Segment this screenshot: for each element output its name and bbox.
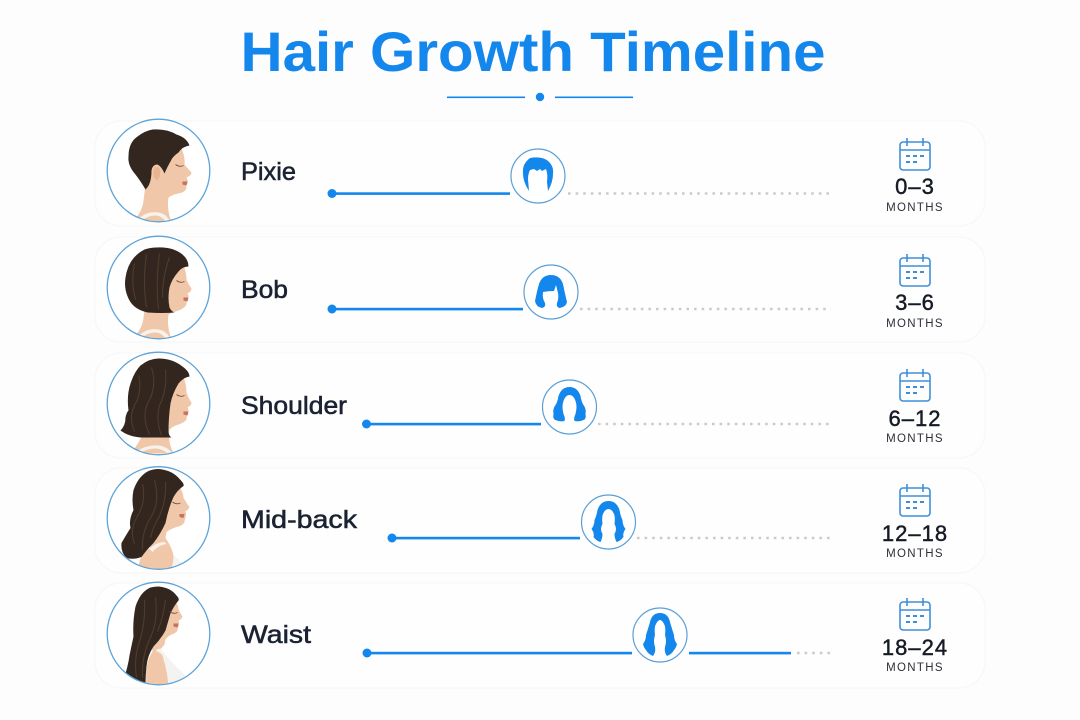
- panel: Shoulder row: [95, 352, 985, 458]
- title: Hair Growth Timeline: [240, 20, 826, 83]
- icon: calendar: [900, 484, 930, 516]
- duration: 6-12 months: 6–12: [889, 406, 941, 431]
- label: Shoulder: [241, 392, 347, 420]
- duration: 6-12 months: [886, 369, 944, 445]
- icon: pixie hair: [511, 149, 565, 203]
- progress track: [362, 648, 831, 658]
- label: Waist: [241, 621, 311, 649]
- duration: 0-3 months: MONTHS: [886, 202, 944, 214]
- title divider: [447, 93, 633, 101]
- panel: Waist row: [95, 582, 985, 688]
- portrait: pixie: [107, 119, 210, 223]
- panel: Mid-back row: [95, 467, 985, 573]
- duration: 3-6 months: 3–6: [895, 290, 935, 315]
- icon: bob hair: [524, 265, 578, 319]
- icon: calendar: [900, 598, 930, 630]
- label: Bob: [241, 276, 288, 304]
- panel: Bob row: [95, 236, 985, 342]
- duration: 12-18 months: [882, 484, 948, 560]
- progress track: [328, 304, 831, 314]
- progress track: [362, 420, 831, 428]
- panel: Pixie row: [95, 119, 985, 226]
- duration: 12-18 months: MONTHS: [886, 548, 944, 560]
- portrait: waist: [107, 582, 210, 686]
- duration: 18-24 months: MONTHS: [886, 662, 944, 674]
- duration: 0-3 months: [886, 138, 944, 214]
- duration: 18-24 months: [882, 598, 948, 674]
- icon: calendar: [900, 138, 930, 170]
- portrait: mid-back: [107, 467, 210, 570]
- duration: 3-6 months: MONTHS: [886, 318, 944, 330]
- label: Mid-back: [241, 506, 358, 534]
- icon: shoulder hair: [542, 380, 596, 434]
- portrait: shoulder: [107, 352, 210, 455]
- duration: 12-18 months: 12–18: [882, 521, 948, 546]
- duration: 6-12 months: MONTHS: [886, 433, 944, 445]
- progress track: [388, 534, 831, 542]
- icon: calendar: [900, 254, 930, 286]
- progress track: [328, 189, 831, 198]
- icon: calendar: [900, 369, 930, 401]
- portrait: bob: [107, 236, 210, 340]
- duration: 3-6 months: [886, 254, 944, 330]
- icon: mid-back hair: [582, 495, 636, 549]
- icon: waist hair: [633, 608, 687, 662]
- duration: 0-3 months: 0–3: [895, 174, 935, 199]
- label: Pixie: [241, 158, 296, 186]
- duration: 18-24 months: 18–24: [882, 635, 948, 660]
